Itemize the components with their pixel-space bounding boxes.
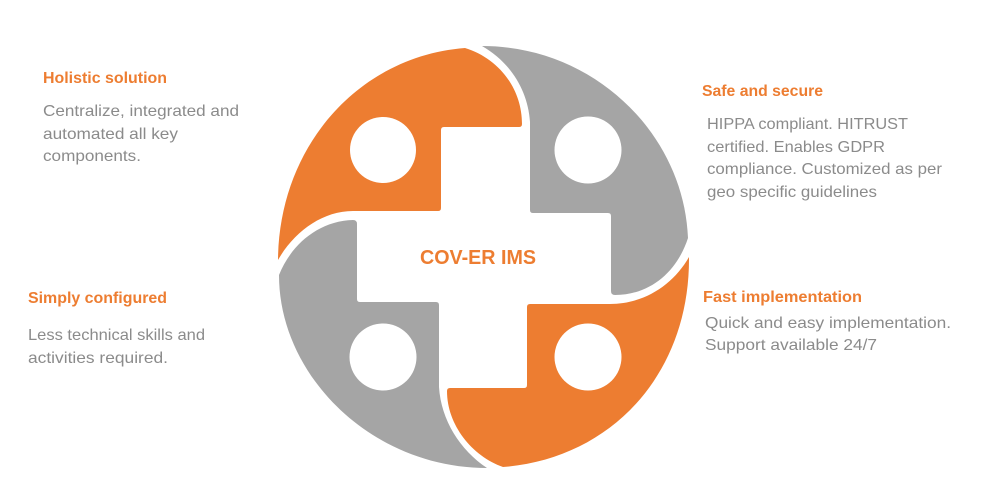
- heading: holistic solution: Holistic solution: [43, 70, 167, 87]
- description: simply configured: Less technical skills and: [28, 327, 205, 344]
- description: safe and secure: [707, 116, 943, 201]
- puzzle segment: top left orange: [278, 48, 522, 260]
- description: simply configured: [28, 327, 205, 367]
- description: fast implementation: Support available 24/7: [705, 337, 877, 354]
- text block: safe and secure: [702, 83, 943, 201]
- heading: fast implementation: Fast implementation: [703, 289, 862, 306]
- description: holistic solution: components.: [43, 148, 141, 165]
- description: safe and secure: compliance. Customized as per: [707, 161, 943, 178]
- heading: safe and secure: Safe and secure: [702, 83, 823, 100]
- circular cross diagram: [278, 46, 689, 468]
- description: simply configured: activities required.: [28, 350, 168, 367]
- description: holistic solution: automated all key: [43, 126, 178, 143]
- description: safe and secure: geo specific guidelines: [707, 184, 877, 201]
- description: holistic solution: [43, 103, 239, 165]
- description: safe and secure: HIPPA compliant. HITRUST: [707, 116, 908, 133]
- puzzle segment: bottom right orange: [447, 257, 689, 467]
- puzzle segment: bottom left gray: [279, 220, 487, 468]
- text block: fast implementation: [703, 289, 951, 354]
- text block: simply configured: [28, 290, 205, 367]
- description: fast implementation: [705, 315, 951, 354]
- puzzle segment: top right gray: [482, 46, 688, 295]
- description: fast implementation: Quick and easy implementation.: [705, 315, 951, 332]
- description: safe and secure: certified. Enables GDPR: [707, 139, 885, 156]
- center label: COV-ER IMS: [420, 247, 536, 269]
- text block: holistic solution: [43, 70, 239, 165]
- description: holistic solution: Centralize, integrated and: [43, 103, 239, 120]
- heading: simply configured: Simply configured: [28, 290, 167, 307]
